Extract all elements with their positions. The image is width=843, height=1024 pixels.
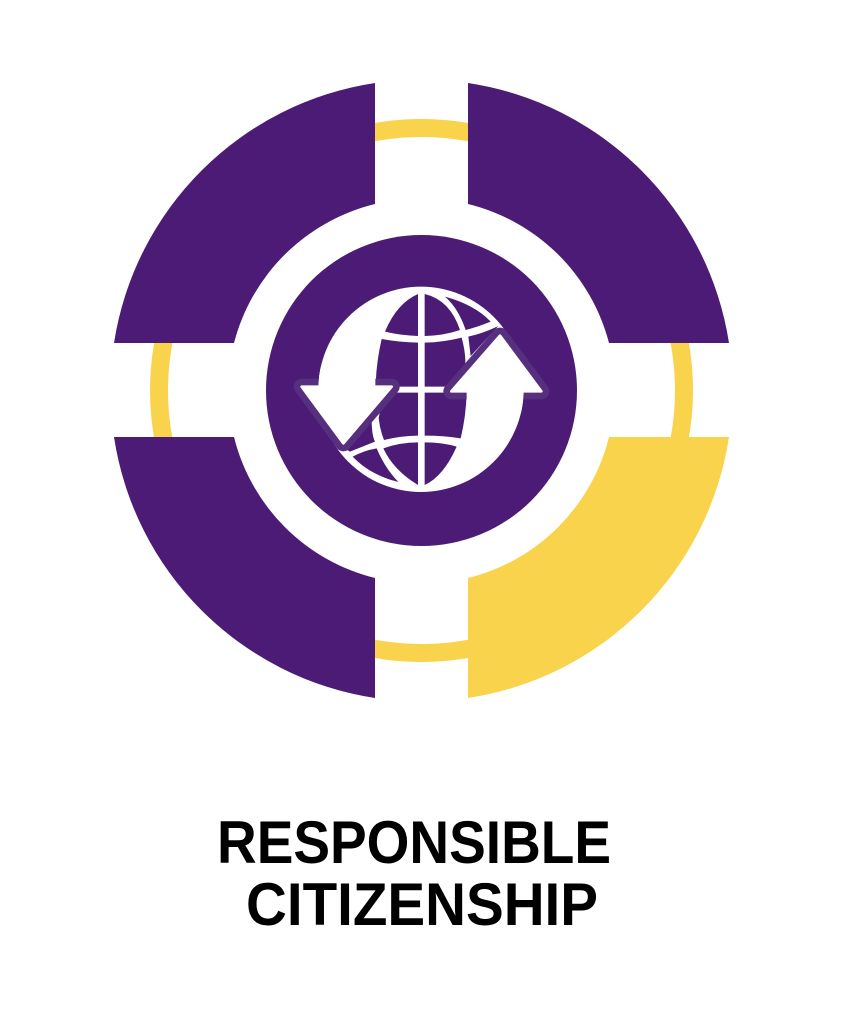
title xyxy=(217,809,611,938)
globe disc xyxy=(318,287,524,492)
arrow: down left xyxy=(302,367,392,443)
title line 1: RESPONSIBLE xyxy=(217,809,611,876)
arrow: up right xyxy=(451,336,541,413)
quadrant: bottom left xyxy=(114,437,375,698)
thin yellow ring xyxy=(159,128,684,653)
arrow halo: left xyxy=(302,387,392,443)
central purple disc xyxy=(266,235,577,546)
emblem: citizenship wheel xyxy=(114,83,729,698)
quadrant: top right xyxy=(468,83,729,343)
arrow halo: right xyxy=(451,336,541,391)
quadrant: top left xyxy=(114,83,375,343)
globe grid cells xyxy=(342,294,498,485)
icon: globe with exchange arrows xyxy=(302,287,541,492)
quadrant: bottom right yellow xyxy=(468,437,729,698)
title line 2: CITIZENSHIP xyxy=(246,871,598,938)
infographic canvas xyxy=(114,83,729,926)
